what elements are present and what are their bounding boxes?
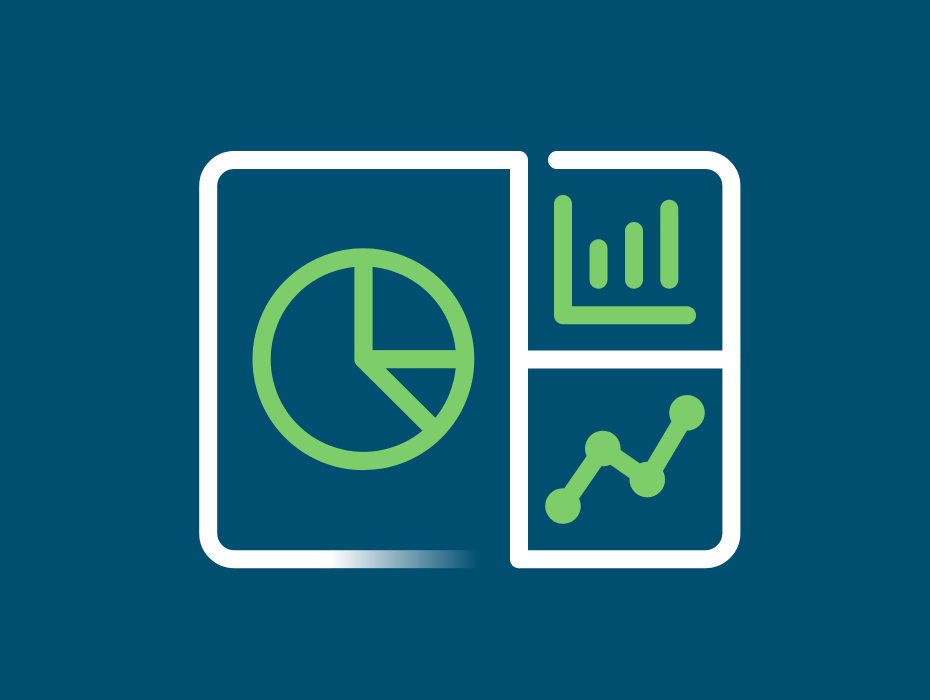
frame: left panel outline: [208, 160, 519, 568]
icon: bar chart: [563, 204, 687, 315]
icon: line chart: [545, 395, 705, 524]
frame: right panels outline: [519, 160, 731, 559]
icon: pie chart: [262, 257, 465, 461]
